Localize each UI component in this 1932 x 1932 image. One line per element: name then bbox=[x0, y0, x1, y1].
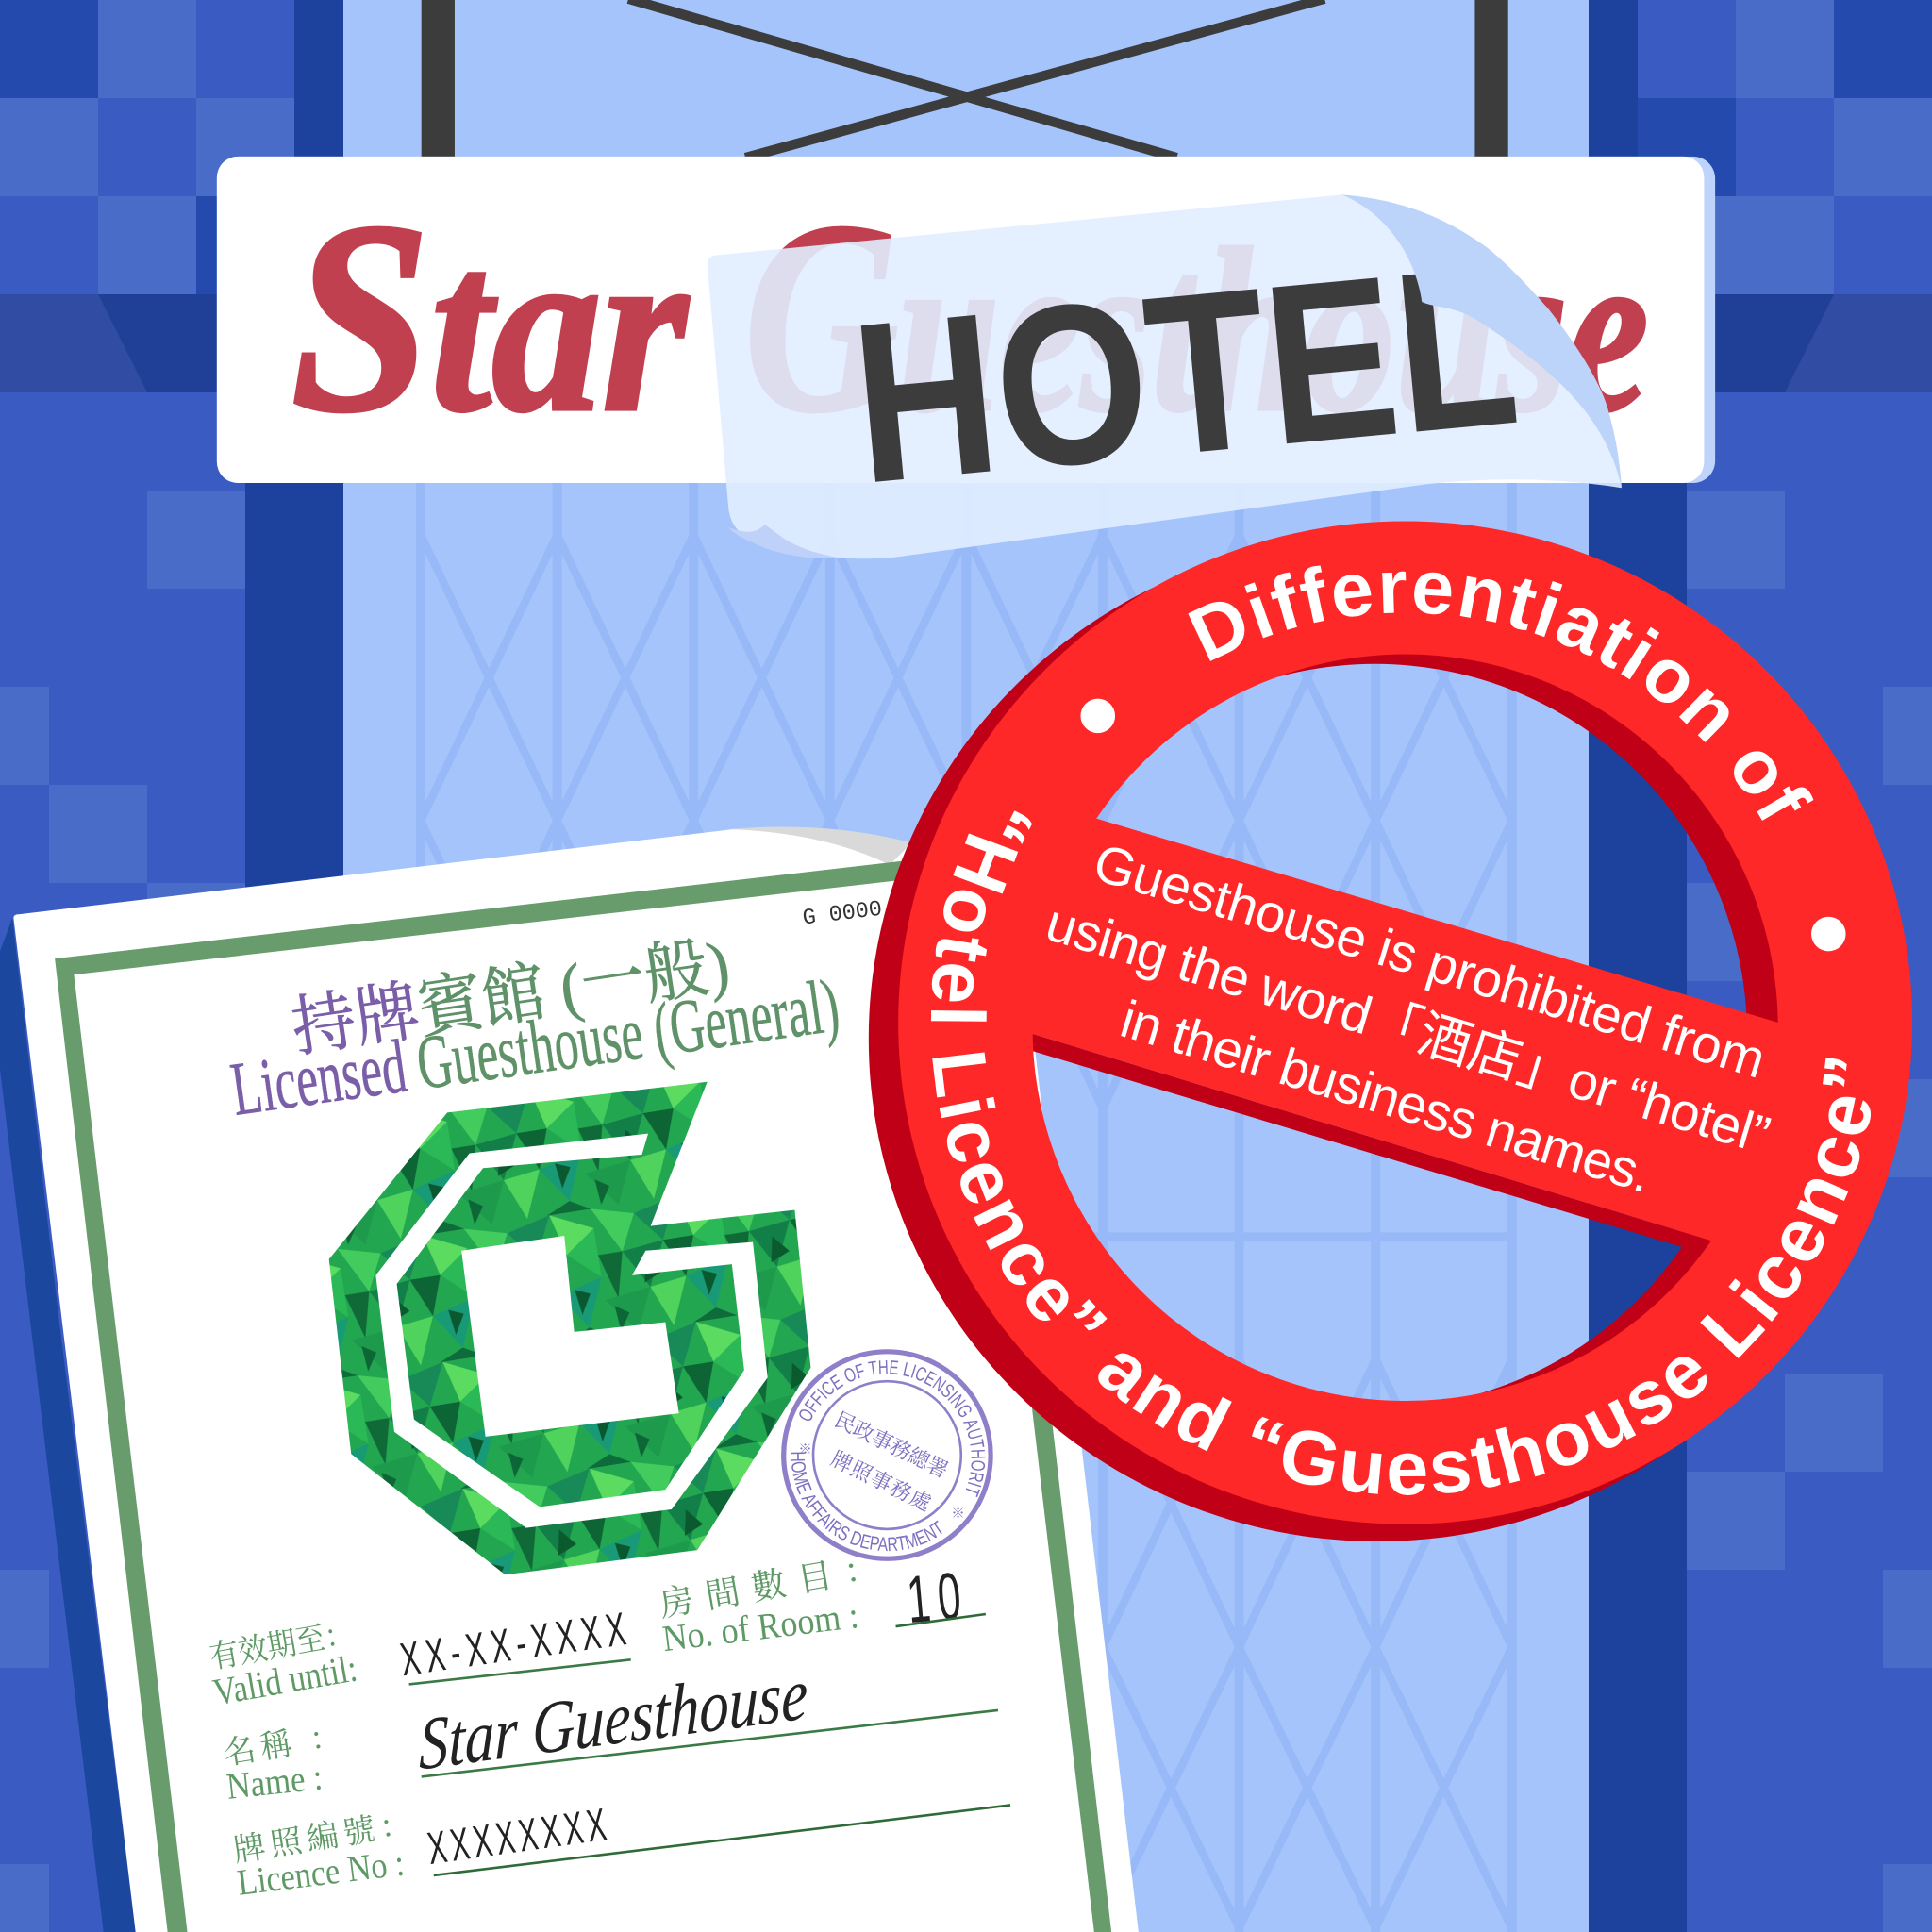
field: valid until bbox=[206, 1607, 360, 1714]
handwritten date: XX-XX-XXXX bbox=[397, 1603, 629, 1686]
ring dot right bbox=[1811, 917, 1846, 951]
elevator gate panel bbox=[343, 0, 1589, 1932]
sign hangers and cross wires bbox=[422, 0, 1508, 158]
sign bar depth bbox=[1033, 1034, 1711, 1247]
sign ring bbox=[898, 521, 1912, 1524]
sign name: Guesthouse (covered by sticker): Guesthouse bbox=[744, 166, 1649, 469]
field: number of rooms: No. of Room : bbox=[660, 1595, 861, 1659]
G logo bbox=[329, 1082, 810, 1574]
hanging sign board bbox=[217, 157, 1715, 483]
prohibition message: using the word「酒店」or “hotel” bbox=[1040, 892, 1776, 1165]
translucent sticker bbox=[708, 194, 1622, 558]
purple licensing stamp: HOME AFFAIRS DEPARTMENT bbox=[791, 1453, 942, 1551]
field: licence number: 牌照編號： bbox=[229, 1796, 419, 1871]
purple licensing stamp: 民政事務總署 bbox=[830, 1403, 954, 1484]
field: name: 名稱 ： bbox=[220, 1708, 349, 1774]
paper shadow bbox=[0, 918, 136, 1932]
field: name: Name : bbox=[225, 1757, 325, 1807]
field: name bbox=[220, 1708, 349, 1807]
field: valid until: Valid until: bbox=[209, 1646, 360, 1714]
sign depth bbox=[869, 536, 1887, 1541]
green certificate border bbox=[55, 852, 1111, 1932]
handwritten room number: 10 bbox=[904, 1559, 964, 1638]
ring heading: bottom arc: “Hotel Licence” and “Guesthouse Licence” bbox=[930, 810, 1872, 1495]
field: number of rooms: 房間數目： bbox=[655, 1538, 894, 1626]
handwritten licence number: XXXXXXXX bbox=[425, 1799, 609, 1874]
field: licence number bbox=[229, 1796, 419, 1904]
purple licensing stamp: OFFICE OF THE LICENSING AUTHORITY bbox=[799, 1360, 985, 1498]
English title: Licensed Guesthouse (General) bbox=[225, 962, 844, 1132]
Chinese title: 持牌賓館 (一般) bbox=[287, 928, 734, 1066]
ring dot left bbox=[1080, 699, 1115, 733]
prohibition message: Guesthouse is prohibited from bbox=[1087, 832, 1773, 1090]
guesthouse licence certificate bbox=[13, 826, 1139, 1932]
sign bar bbox=[961, 792, 1836, 1259]
red prohibition sign bbox=[868, 521, 1913, 1541]
paper sheet bbox=[13, 828, 1139, 1932]
prohibition message: in their business names. bbox=[1114, 989, 1658, 1204]
handwritten room number bbox=[896, 1559, 986, 1638]
purple licensing stamp bbox=[781, 1349, 993, 1561]
ring heading: top arc: Differentiation of bbox=[1188, 566, 1813, 821]
handwritten licence number bbox=[425, 1799, 1010, 1875]
purple licensing stamp: 牌照事務處 bbox=[826, 1442, 937, 1517]
sticker peeled corner bbox=[1341, 194, 1622, 488]
sign name: Star: Star bbox=[291, 166, 690, 469]
field: valid until: 有效期至： bbox=[206, 1607, 357, 1677]
sticker word: HOTEL: HOTEL bbox=[843, 217, 1527, 532]
field: licence number: Licence No : bbox=[235, 1842, 407, 1904]
purple licensing stamp: ※ bbox=[798, 1439, 812, 1458]
sticker lower corner shade bbox=[728, 525, 842, 558]
purple licensing stamp: ※ bbox=[951, 1503, 965, 1523]
paper curled corner bbox=[729, 826, 912, 865]
handwritten name: Star Guesthouse bbox=[419, 1653, 808, 1787]
serial number: G 0000 bbox=[801, 897, 884, 932]
